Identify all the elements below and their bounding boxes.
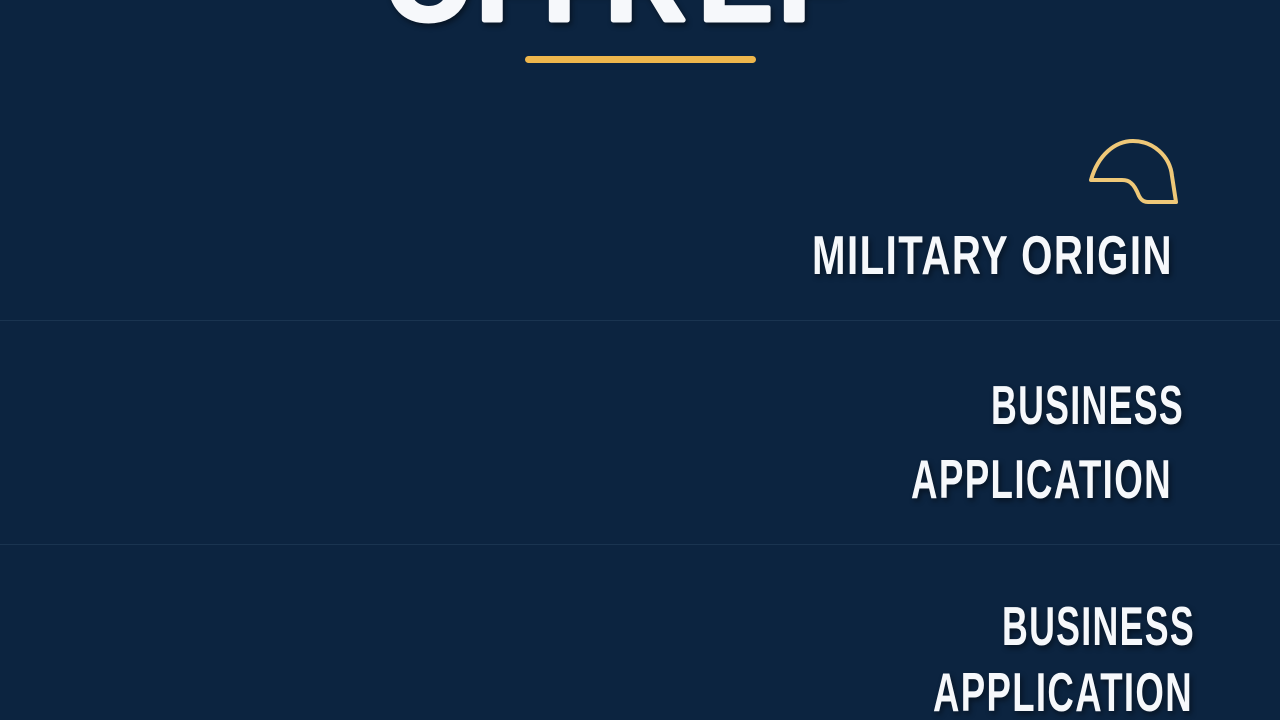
icon: military helmet [1091, 141, 1176, 202]
title underline [525, 56, 756, 63]
label: business application, first block [911, 374, 1184, 510]
label: business application, second block [933, 595, 1195, 720]
label: business application, first block: BUSINESS [991, 374, 1184, 436]
